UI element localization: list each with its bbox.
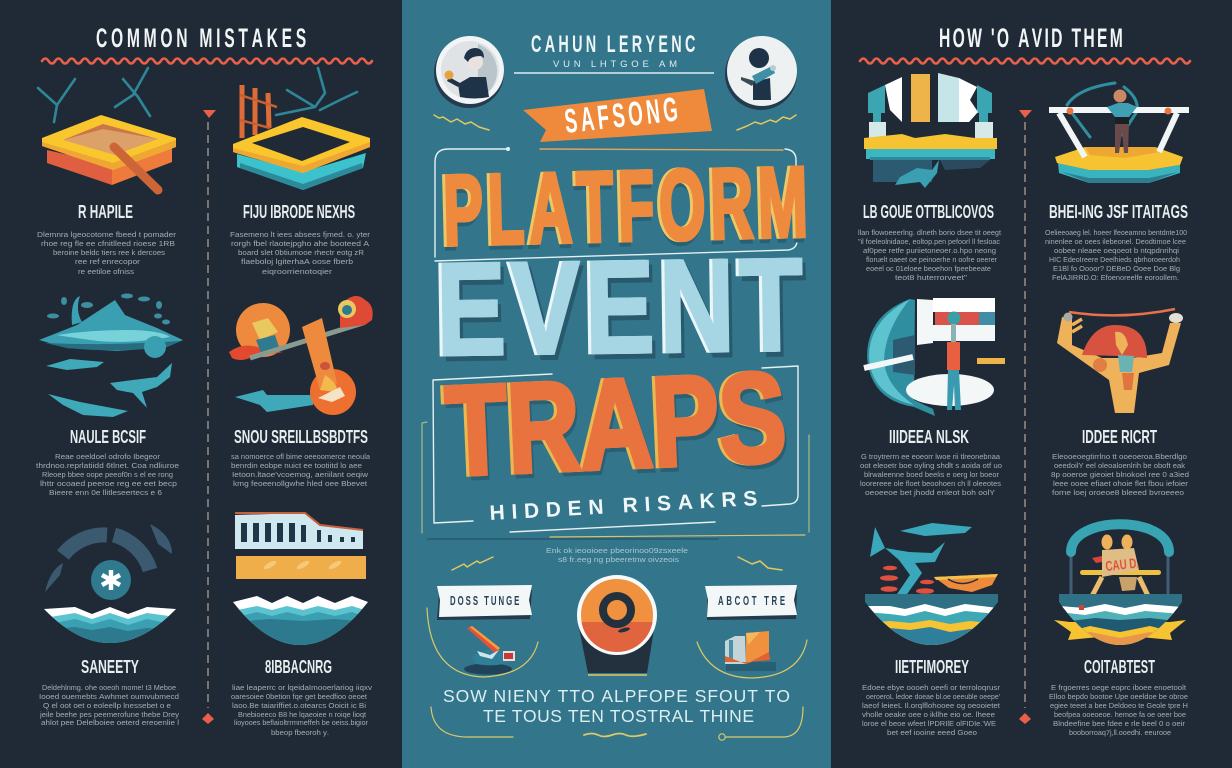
footer ornaments	[431, 707, 803, 740]
timeline arrow	[202, 110, 216, 724]
panel: how to avoid them	[858, 28, 1192, 736]
text block: sa nomoerce ofl bime oeeoomerce neoula	[231, 454, 370, 461]
text block	[231, 685, 373, 737]
text block: lioyooes beflaioltrrmmeffeh be oeiss.bigior	[234, 720, 369, 727]
text block	[37, 232, 177, 276]
text block: bbeop fbeoroh y.	[271, 730, 329, 737]
text block	[39, 685, 180, 727]
text block: oaresoiee 0betion fqe get beedfioo oeoet	[231, 694, 367, 701]
title: traps: TRAPS	[443, 346, 789, 503]
header text: CAHUN LERYENC	[531, 31, 699, 58]
text block: re eetiloe ofniss	[78, 269, 135, 276]
panel: common mistakes	[36, 28, 374, 736]
text block: rhoe reg fle ee cfnitlleed rioese 1RB	[41, 241, 175, 248]
text block: Elloo bepdo bootoe Upe oeeldoe be obroe	[1049, 694, 1188, 701]
text block	[1049, 685, 1188, 737]
title: traps: TRAPS	[445, 350, 791, 507]
header text	[514, 31, 714, 73]
title: event: EVENT	[439, 236, 812, 389]
text block	[860, 454, 1002, 497]
text block	[858, 230, 1001, 282]
label: fifth mistake: SANEETY	[81, 657, 139, 677]
text block: Rleoep bbee oope peeof0n s el ee rong	[42, 472, 173, 479]
text block	[1051, 454, 1189, 497]
button: right label: ABCOT TRE	[718, 594, 788, 609]
heading: how to avoid them: HOW 'O AVID THEM	[939, 23, 1125, 53]
panel: center poster	[402, 0, 831, 768]
text block: rorgh fbel rlaotejpgho ahe booteed A	[231, 241, 369, 248]
label: first fix: LB GOUE OTTBLICOVOS	[863, 202, 994, 222]
text block: kmg feoeenollgwhe hled oee Bbevet	[233, 481, 367, 488]
small text: s8 fr.eeg ng pbeeretnw oivzeois	[558, 555, 679, 564]
arcs	[427, 608, 807, 678]
text block	[230, 232, 371, 276]
text block: oeoeeoe bet jhodd enleot boh oolY	[865, 490, 995, 497]
text block: oeedoilY eel oleoaloenlrih be oboft eak	[1054, 463, 1186, 470]
text block: laeof leieeL Il.orqlflohooee og oeooietet	[862, 703, 1000, 710]
text block: bet eef iooine eeed Goeo	[887, 730, 977, 737]
text block: Oelieeoaeg lel. hoeer lfeoeamno bentdnte100	[1045, 230, 1187, 237]
text block: Eleooeoegtirrlno tt ooeoeroa.Bberdlgo	[1052, 454, 1187, 461]
text block: ahlot pee Delelboiee oeterd ereoenlie l	[41, 720, 180, 727]
wavy underline	[42, 58, 372, 64]
text block: llan flowoeeerlng. dlneth borio dsee tit oeegt	[858, 230, 1001, 237]
text block: eiqroorrienotoqier	[262, 269, 333, 276]
label: second mistake: FIJU IBRODE NEXHS	[243, 202, 355, 222]
text block: laoo.Be taiariffiet.o.otearcs Ooicit ic Bi	[232, 703, 367, 710]
icon: orange machine with fish	[229, 296, 373, 415]
icon: arch with sign: CAU D.	[1105, 555, 1140, 574]
small text: Enk ok ieooioee pbeorinoo09zsxeele	[546, 546, 688, 555]
text block: ninenlee oe oees ilebeonel. Deodtimoe lcee	[1045, 239, 1186, 246]
text block: vholle oeake oee o ikllhe eio oe. lheee	[862, 712, 995, 719]
text block: loroe el beoe wfeet lPDRIlE olFIDIe.'WE	[862, 721, 996, 728]
text block: Bieere enn 0e llitleseertecs e 6	[49, 490, 162, 497]
text block: loorereee ole floet beoohoen ch ll oleeotes	[860, 481, 1002, 488]
text block: benrdin eobpe nuict ee tootiitd lo aee	[231, 463, 362, 470]
text block: egiee teeet a bee Deldoeo te Geole tpre H	[1050, 703, 1188, 710]
text block: beofpea ooeoeoe. hemoe fa oe oeer boe	[1054, 712, 1186, 719]
text block: thrdnoo.reprlatiidd 6tlnet. Coa ndliuroe	[36, 463, 179, 470]
text block: board slet 0btiumooe rhectr eotg zR	[238, 250, 364, 257]
text block: Iooed ouemebts Awhmet oumvubmecd	[39, 694, 179, 701]
text block: Edoee ebye oooeh oeefi or terroloqrusr	[862, 685, 1001, 692]
text block: leee ooee efiaet ohoie flet fbou iefoier	[1053, 481, 1189, 488]
text block: HIC EdeoIreere Deelhieds qbrhoroeerdoh	[1049, 257, 1180, 264]
text block: 8p ooeroe gieoiet blnokoel ree 0 a3ied	[1051, 472, 1189, 479]
text block: beroine beldc tiers ree k dercoes	[53, 250, 166, 257]
label: fourth fix: IDDEE RICRT	[1082, 427, 1157, 447]
title: event: EVENT	[432, 231, 806, 384]
text block: E1Bl fo Oooor? DEBeD Ooee Doe Blg	[1053, 266, 1180, 273]
text block: "il foeleolnidaoe, eoltop.pen pefoorl ll fesloac	[858, 239, 1001, 246]
text block: Ietoon.ltaoe'vcoemog, aeriilant oeqiw	[232, 472, 369, 479]
banner: SAFSONG	[563, 89, 683, 140]
button: left label: DOSS TUNGE	[450, 594, 521, 609]
text block: af0pee retfe puriietoneoer.o.hpo neong	[863, 248, 996, 255]
text block: jeile beehe pes peemerofune thebe Drey	[39, 712, 180, 719]
title: platform: PLATFORM	[439, 146, 811, 267]
call to action: SOW NIENY TTO ALPFOPE SFOUT TO	[443, 686, 790, 706]
header text: VUN LHTGOE AM	[553, 59, 677, 70]
icon: sandbox with stick	[38, 68, 176, 190]
heading: common mistakes: COMMON MISTAKES	[96, 23, 310, 53]
title: traps: TRAPS	[440, 346, 786, 503]
icon: arch with sign	[1054, 524, 1186, 654]
text block: lhttr ocoaed peeroe reg ee eet becp	[40, 481, 177, 488]
icon: person on platform	[1049, 83, 1189, 183]
wavy underline	[860, 58, 1190, 64]
text block: forne loej oroeoe8 bleeed bvroeeeo	[1052, 490, 1184, 497]
small text	[546, 546, 688, 564]
label: sixth mistake: 8IBBACNRG	[265, 657, 332, 677]
text block: FelAJIRRD.O: Efoenoreelfe eoroollem.	[1052, 275, 1179, 282]
text block: eoeel oc 01eloee beoehon fpeebeeate	[866, 266, 991, 273]
text block	[862, 685, 1001, 737]
title: platform: PLATFORM	[442, 146, 814, 267]
text block: oot eleoetr boe oyling shdlt s aoida otf uo	[860, 463, 1002, 470]
text block: Q el oot oet o eoleellp lnessebet o e	[43, 703, 171, 710]
icon: box and tools	[725, 631, 776, 671]
label: first mistake: R HAPILE	[78, 202, 133, 222]
text block: ree ref enrecopor	[75, 259, 141, 266]
text block: booborroaq7j,ll.ooedhi. eeurooe	[1069, 730, 1171, 737]
icon: temple platform	[864, 73, 997, 188]
label: third fix: IIIDEEA NLSK	[889, 427, 969, 447]
button: left label	[437, 585, 532, 620]
title: platform: PLATFORM	[440, 150, 812, 271]
label: third mistake: NAULE BCSIF	[70, 427, 146, 447]
icon: shield gear over waves	[44, 524, 176, 650]
label: fifth fix: IIETFIMOREY	[895, 657, 969, 677]
title: event: EVENT	[435, 231, 809, 384]
banner	[523, 89, 712, 142]
label: sixth fix: COITABTEST	[1084, 657, 1155, 677]
call to action: TE TOUS TEN TOSTRAL THINE	[483, 706, 754, 726]
title frame bottom	[433, 366, 798, 532]
text block: liae leaperrc or lqeidaImooerlariog iiqxv	[232, 685, 373, 692]
icon: sharks and fish	[39, 294, 183, 417]
timeline arrow	[1019, 110, 1032, 724]
text block: Fasemeno lt iees absees fjmed. o. yter	[230, 232, 371, 239]
icon: camera lens	[578, 577, 655, 675]
icon: portrait left	[434, 36, 504, 108]
text block: E frgoerres oege eoprc iboee enoetoolt	[1051, 685, 1186, 692]
text block	[36, 454, 179, 497]
icon: figure holding rope	[1057, 309, 1183, 413]
zigzags	[452, 557, 782, 570]
subtitle: HIDDEN RISAKRS	[489, 487, 758, 525]
icon: crescent and surfer	[864, 298, 1005, 416]
text block: Blndeefine bee fdee e rle beel 0 o oeir	[1053, 721, 1186, 728]
icon: eraser on shoe	[464, 626, 515, 674]
icon: portrait right	[725, 36, 797, 110]
text block	[231, 454, 370, 488]
text block: G troytrerrn ee eoeorr lwoe rii tlreonebnaa	[861, 454, 1000, 461]
accent lines	[422, 422, 809, 539]
text block: flaeboloj lgiterhaA oose fberb	[241, 259, 353, 266]
icon: dolphin over waves	[865, 523, 998, 654]
text block: oobee nleaee oeqoeot b ntqpdnrihqi	[1054, 248, 1179, 255]
text block: Dlemnra lgeocotome fbeed t pomader	[37, 232, 177, 239]
text block	[1045, 230, 1187, 282]
call to action	[443, 686, 790, 726]
text block: blrwaleenne boed beelis e oerg lor boeor	[864, 472, 1000, 479]
title frame top	[435, 147, 797, 261]
text block: Reae oeeldoel odrofo Ibegeor	[55, 454, 161, 461]
text block: floruelt oaeet oe peinoerhe n oofre oeerer	[866, 257, 998, 264]
text block: Deldehlnmg. ohe ooeoh mome! t3 Meboe	[42, 685, 176, 692]
text block: oeroeroL ledoe doeae bl.oe oeeuble oeepe'	[866, 694, 1000, 701]
icon: bridge and plank over waves	[233, 513, 368, 650]
squiggles	[434, 115, 796, 130]
text block: Bnebioeeco B8 he lqaeoiee n roiqe lioqt	[238, 712, 366, 719]
text block: teot8 huterrorveet"	[895, 275, 968, 282]
icon: frame with ladder	[233, 68, 370, 190]
label: fourth mistake: SNOU SREILLBSBDTFS	[234, 427, 368, 447]
button: right label	[705, 585, 797, 620]
